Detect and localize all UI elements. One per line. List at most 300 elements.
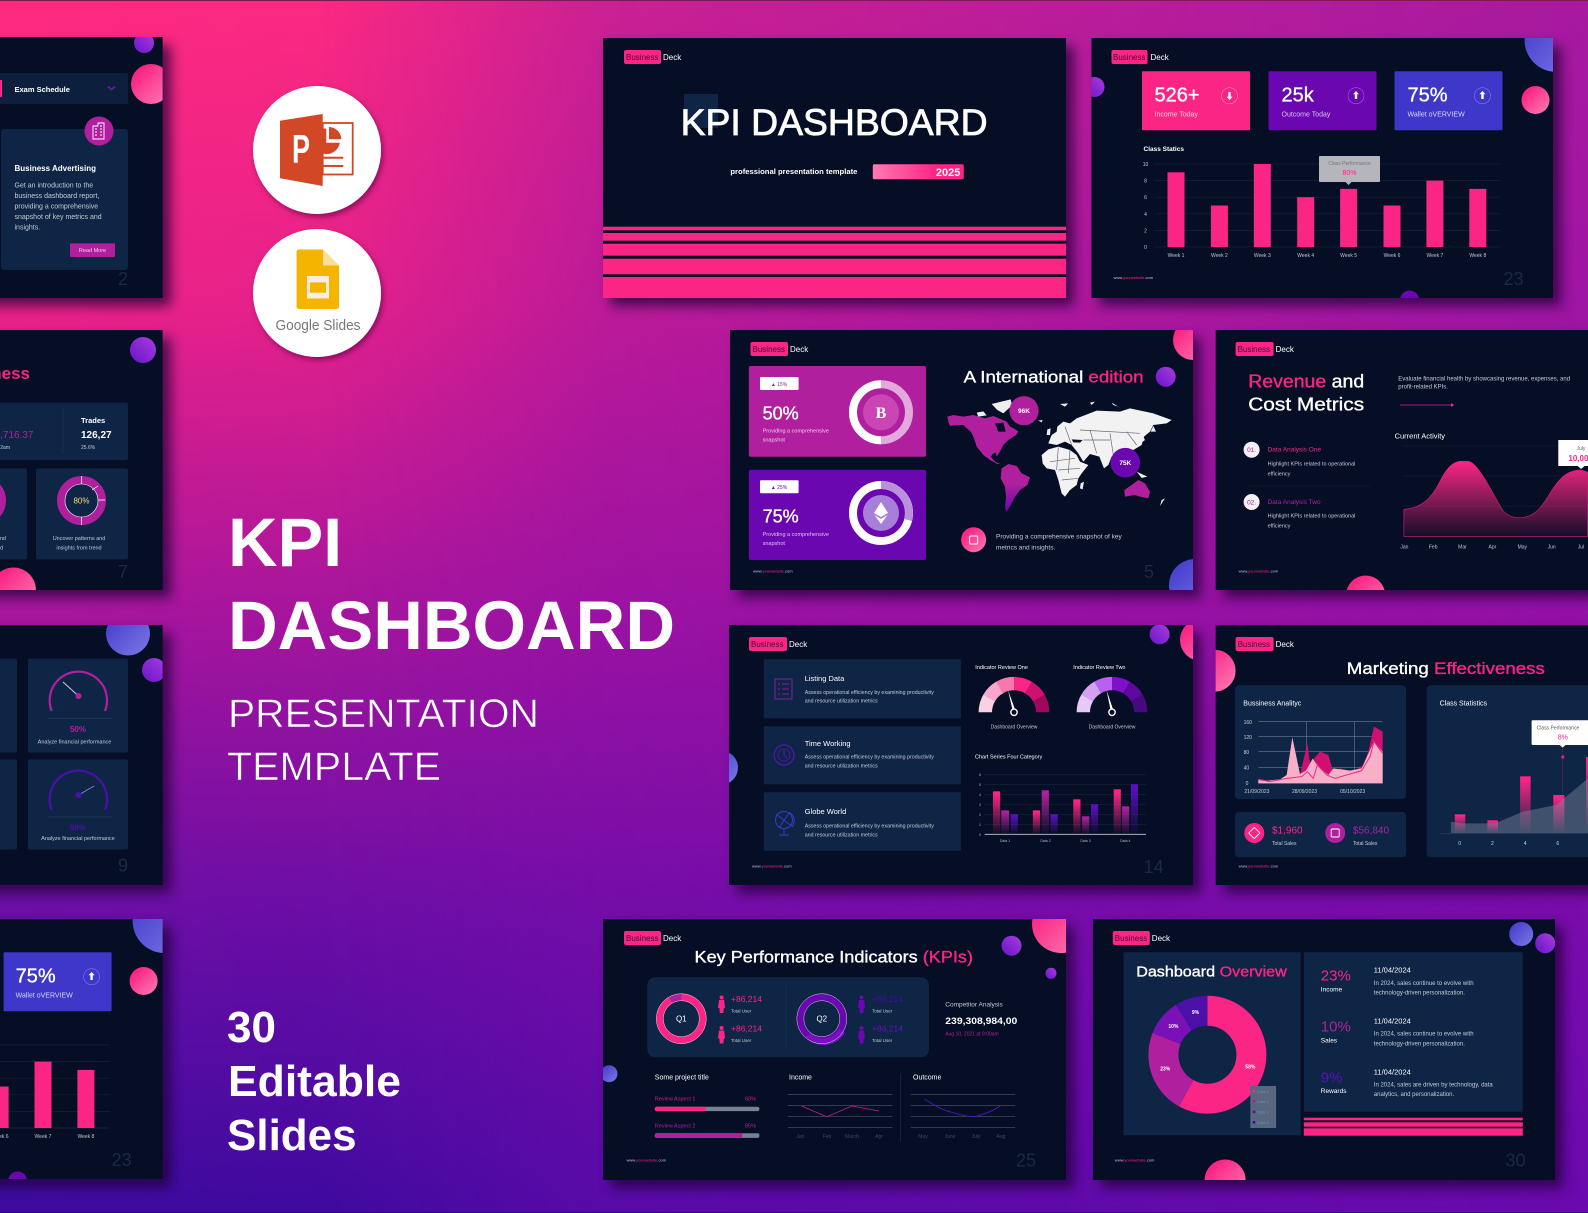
exam schedule bar: Exam Schedule xyxy=(14,85,70,94)
logo: Business xyxy=(752,345,785,354)
list item 02: efficiency xyxy=(1268,524,1291,530)
progress bars: Review Aspect 1 xyxy=(655,1097,695,1103)
icon: PowerPoint badge xyxy=(253,86,381,214)
gauge card top: 50% xyxy=(70,725,86,734)
panel: quarter stats xyxy=(647,977,929,1057)
user stats: +86,214 xyxy=(731,994,762,1004)
card: listing data: and resource utilization metrics xyxy=(805,699,878,705)
panel: class statistics: 4 xyxy=(1524,841,1527,847)
panel: business analytic: 28/09/2023 xyxy=(1292,789,1317,795)
list item 02: 02. xyxy=(1247,499,1256,506)
card: ethereum 75%: snapshot xyxy=(763,541,785,547)
logo xyxy=(1236,637,1295,651)
donut card left: nd xyxy=(0,536,6,542)
panel: class statistics: 6 xyxy=(1556,841,1559,847)
gauge card top xyxy=(28,659,128,753)
gauge one xyxy=(975,665,1043,741)
panel: marketing effectiveness slide xyxy=(1194,625,1588,893)
donut card right: Uncover patterns and xyxy=(53,536,105,542)
card: bitcoin 50% xyxy=(749,366,926,457)
icon and caption: metrics and insights. xyxy=(996,544,1055,551)
card: business advertising: snapshot of key metrics and xyxy=(14,214,102,221)
panel: class statistics: Class Statistics xyxy=(1440,700,1488,707)
map: South America xyxy=(1001,464,1030,512)
legend: Data 2 xyxy=(1257,1099,1269,1104)
stats panel: Trades xyxy=(81,416,105,425)
footer url: www.yourwebsite.com xyxy=(753,568,793,574)
user stats: Total User xyxy=(731,1038,752,1043)
tagline: professional presentation template xyxy=(730,167,857,176)
logo xyxy=(624,50,682,64)
heading xyxy=(1248,372,1364,415)
card: bitcoin 50%: Providing a comprehensive xyxy=(763,429,829,435)
wallet card xyxy=(4,952,112,1011)
user stats: +86,214 xyxy=(731,1023,762,1033)
user stats: +86,214 xyxy=(872,1023,903,1033)
logo xyxy=(1236,342,1295,356)
footer url: www.yourwebsite.com xyxy=(1114,275,1154,280)
card: globe world: and resource utilization metrics xyxy=(805,832,878,838)
logo xyxy=(624,931,682,945)
logo: Deck xyxy=(663,53,682,62)
icon: Google Slides badge xyxy=(253,229,381,357)
page number: 5 xyxy=(1144,562,1154,582)
area chart: Feb xyxy=(1429,545,1438,551)
subtitle: TEMPLATE xyxy=(227,745,441,789)
bar chart: 0 xyxy=(1144,245,1147,251)
bar chart: Week 7 xyxy=(1426,253,1444,259)
panel: title slide KPI Dashboard xyxy=(603,38,1074,306)
chart heading: Current Activity xyxy=(1395,431,1445,440)
panel: sales stats xyxy=(1235,812,1406,857)
outcome line chart: July xyxy=(972,1134,981,1140)
gauge one: Dashboard Overview xyxy=(991,725,1038,731)
card: listing data: Assess operational efficiency by examining productivity xyxy=(805,690,934,696)
bubble 75K xyxy=(1110,448,1140,478)
slide count text xyxy=(227,1003,401,1160)
stat card: income xyxy=(1142,71,1250,130)
grouped bar chart: Data 4 xyxy=(1120,839,1131,843)
grouped bar chart: 0 xyxy=(979,833,981,837)
card: bitcoin 50%: B xyxy=(876,405,887,422)
card: time working: Assess operational efficiency by examining productivity xyxy=(805,755,934,761)
description: Evaluate financial health by showcasing revenue, expenses, and xyxy=(1398,377,1570,383)
logo: Business xyxy=(751,640,783,649)
stats panel xyxy=(0,403,128,460)
subtitle: PRESENTATION xyxy=(228,692,539,736)
donut card right: 80% xyxy=(73,496,90,506)
tooltip: Class Performance xyxy=(1328,161,1371,167)
donut card right xyxy=(36,468,128,559)
year pill: 2025 xyxy=(936,167,960,179)
stat card: wallet: 75% xyxy=(1408,85,1448,107)
panel: KPI details: technology-driven personalization. xyxy=(1374,1041,1465,1047)
card: business advertising: Business Advertising xyxy=(14,164,96,173)
card: time working xyxy=(764,726,961,784)
bar chart fragment: Week 8 xyxy=(77,1134,95,1140)
donut card left: d xyxy=(0,546,3,552)
progress bars: 85% xyxy=(745,1123,756,1129)
user stats: Total User xyxy=(872,1008,893,1013)
panel: KPI details: analytics, and personalization. xyxy=(1374,1092,1455,1098)
heading: Key Performance Indicators (KPIs) xyxy=(694,948,973,967)
main title: KPI xyxy=(228,504,342,581)
bar chart: 6 xyxy=(1144,195,1147,201)
grouped bar chart xyxy=(979,773,1146,843)
map: North America and Australia xyxy=(947,415,1150,498)
panel: KPI details: 10% xyxy=(1321,1019,1351,1036)
gauge one: Indicator Review One xyxy=(975,665,1028,671)
area chart: Jul xyxy=(1578,545,1584,551)
heading: Cost Metrics xyxy=(1248,395,1364,415)
legend xyxy=(1250,1086,1276,1128)
map: Eurasia and Africa xyxy=(1042,408,1172,497)
gauge two: Indicator Review Two xyxy=(1073,665,1125,671)
gauge card top: Analyze financial performance xyxy=(38,740,111,746)
panel: donut chart: 23% xyxy=(1160,1066,1171,1072)
footer url: www.yourwebsite.com xyxy=(752,864,792,868)
logo: Deck xyxy=(1276,640,1295,649)
bar chart xyxy=(1143,162,1500,259)
panel: sales stats: Total Sales xyxy=(1272,841,1297,847)
panel: KPI details: technology-driven personalization. xyxy=(1374,991,1465,997)
list item 02: Data Analysis Two xyxy=(1268,499,1321,506)
heading: Marketing Effectiveness xyxy=(1347,659,1545,678)
panel: international edition slide (5) xyxy=(730,320,1221,611)
outcome line chart xyxy=(911,1075,1015,1140)
stats panel: 25.6% xyxy=(81,445,96,451)
panel: left slide Gauges (9) xyxy=(0,612,171,893)
map: Arctic and islands xyxy=(977,399,1165,506)
logo: Deck xyxy=(1276,345,1295,354)
page number: 25 xyxy=(1016,1151,1036,1171)
panel: KPI details: Rewards xyxy=(1321,1088,1347,1095)
bar chart: 8 xyxy=(1144,179,1147,185)
grouped bar chart: 6 xyxy=(979,773,981,777)
tooltip: Class Performance xyxy=(1537,726,1579,732)
footer url: www.yourwebsite.com xyxy=(626,1158,667,1162)
description: profit-related KPIs. xyxy=(1398,385,1448,391)
card: globe world xyxy=(764,792,961,851)
card: business advertising: Get an introduction to the xyxy=(14,182,93,190)
page number: 9 xyxy=(118,856,128,876)
list item 01: efficiency xyxy=(1268,472,1291,478)
panel: KPI details: In 2024, sales are driven by technology, data xyxy=(1374,1082,1493,1088)
income line chart: Jan xyxy=(796,1134,805,1140)
tooltip: 8% xyxy=(1558,734,1568,741)
bubble 96K xyxy=(1009,396,1039,425)
tooltip: July xyxy=(1577,446,1586,452)
bar chart: Week 8 xyxy=(1469,253,1486,259)
heading: A International edition xyxy=(964,367,1144,386)
panel: weekly bar chart slide (23) xyxy=(1084,8,1588,310)
wallet card: 75% xyxy=(16,966,56,988)
card: listing data xyxy=(764,659,961,718)
card: business advertising: Read More xyxy=(79,248,106,254)
gauge card bottom xyxy=(28,760,128,850)
logo: Deck xyxy=(1152,934,1171,943)
card: ethereum 75% xyxy=(749,470,926,560)
outcome line chart: June xyxy=(945,1134,956,1140)
panel: business analytic: 05/10/2023 xyxy=(1340,789,1365,795)
page number: 30 xyxy=(1506,1151,1526,1171)
user stats: Total User xyxy=(872,1038,893,1043)
grouped bar chart: Data 3 xyxy=(1080,839,1091,843)
outcome line chart: May xyxy=(918,1134,928,1140)
logo: Deck xyxy=(1150,53,1170,62)
bar chart: Week 3 xyxy=(1254,253,1271,259)
bar chart: Week 1 xyxy=(1168,253,1185,259)
icon and caption: Providing a comprehensive snapshot of key xyxy=(996,534,1122,541)
card: business advertising: providing a comprehensive xyxy=(14,204,98,210)
panel: KPI details: 11/04/2024 xyxy=(1374,1016,1411,1025)
slide title: KPI DASHBOARD xyxy=(681,102,988,143)
bar chart: 4 xyxy=(1144,212,1147,218)
panel: donut chart xyxy=(1124,952,1301,1135)
main title xyxy=(228,504,675,664)
panel: sales stats: $1,960 xyxy=(1272,825,1303,836)
area chart: Apr xyxy=(1489,545,1497,551)
panel: class statistics: 0 xyxy=(1458,841,1461,847)
card: globe world: Assess operational efficiency by examining productivity xyxy=(805,823,934,829)
progress bars: Some project title xyxy=(655,1075,709,1082)
pink stripes xyxy=(1304,1118,1523,1136)
subtitle xyxy=(227,692,539,789)
panel: KPI details: 23% xyxy=(1321,968,1351,985)
logo xyxy=(749,637,808,651)
donut Q2: Q2 xyxy=(816,1014,828,1024)
panel: business analytic: 160 xyxy=(1244,720,1252,726)
bar chart: Week 6 xyxy=(1384,253,1401,259)
panel: donut chart: Dashboard Overview xyxy=(1136,963,1287,980)
legend: Data 3 xyxy=(1257,1110,1269,1115)
list item 01 xyxy=(1244,442,1355,478)
panel: donut chart: 9% xyxy=(1192,1010,1200,1016)
progress bars: 60% xyxy=(745,1097,756,1103)
icon and caption xyxy=(961,527,1122,552)
income line chart: Apr xyxy=(875,1134,883,1140)
logo: Business xyxy=(626,53,658,62)
tooltip xyxy=(1319,156,1380,185)
logo xyxy=(1113,931,1171,945)
legend: Data 4 xyxy=(1257,1120,1269,1125)
page number: 7 xyxy=(118,562,128,582)
card: business advertising: insights. xyxy=(14,225,40,232)
slide count text: 30 xyxy=(227,1003,276,1052)
grouped bar chart: 1 xyxy=(979,823,981,827)
gauge card bottom: 50% xyxy=(70,824,86,833)
panel: class statistics xyxy=(1427,685,1588,857)
panel: KPI details: 11/04/2024 xyxy=(1374,966,1411,975)
card: bitcoin 50%: ▲ 15% xyxy=(771,382,788,388)
grouped bar chart: Data 2 xyxy=(1040,839,1051,843)
logo: Business xyxy=(1115,934,1147,943)
bar chart: Week 5 xyxy=(1340,253,1357,259)
stat card: income: 526+ xyxy=(1154,85,1200,107)
outcome line chart: Aug xyxy=(997,1134,1006,1140)
panel: revenue and cost metrics slide xyxy=(1216,330,1588,614)
outcome line chart: Outcome xyxy=(913,1075,942,1082)
panel: dashboard overview slide (30) xyxy=(1093,919,1563,1200)
donut card right: insights from trend xyxy=(56,546,102,552)
area chart xyxy=(1400,446,1588,551)
panel: sales stats: Total Sales xyxy=(1353,841,1378,847)
stat card: wallet: Wallet oVERVIEW xyxy=(1408,112,1465,119)
panel: sales stats: $56,840 xyxy=(1353,825,1389,836)
arrow xyxy=(1400,403,1454,407)
gauge two xyxy=(1073,665,1141,741)
bar chart fragment xyxy=(0,1045,110,1140)
icon: PowerPoint badge: P xyxy=(292,128,310,172)
stat card: outcome: Outcome Today xyxy=(1282,112,1331,119)
income line chart: Income xyxy=(789,1075,812,1082)
competitor analysis: 239,308,984,00 xyxy=(945,1016,1017,1026)
footer url: www.yourwebsite.com xyxy=(1115,1158,1155,1162)
logo xyxy=(1112,50,1170,64)
chart heading: Chart Series Four Category xyxy=(975,754,1042,760)
card: time working: Time Working xyxy=(805,739,851,748)
panel: KPI details: 11/04/2024 xyxy=(1374,1067,1411,1076)
user stats xyxy=(718,994,903,1044)
main title: DASHBOARD xyxy=(228,587,675,664)
progress bars: Review Aspect 2 xyxy=(655,1123,695,1129)
panel: class statistics: 2 xyxy=(1491,841,1494,847)
panel: left slide Business (7) xyxy=(0,330,171,612)
logo: Deck xyxy=(790,345,809,354)
panel: business analytic: 40 xyxy=(1244,766,1249,772)
card: ethereum 75%: 75% xyxy=(763,507,799,527)
panel: KPI details: Income xyxy=(1321,986,1343,993)
logo: Deck xyxy=(789,640,808,649)
panel: KPI details: In 2024, sales continue to evolve with xyxy=(1374,981,1474,987)
description xyxy=(1398,377,1570,391)
logo: Business xyxy=(1238,345,1270,354)
area chart: Jan xyxy=(1400,545,1409,551)
page number: 2 xyxy=(118,269,128,289)
user stats: Total User xyxy=(731,1008,752,1013)
area chart: May xyxy=(1518,545,1528,551)
world map xyxy=(947,399,1172,512)
chart heading: Class Statics xyxy=(1144,146,1184,153)
bubble 96K: 96K xyxy=(1018,408,1030,415)
page number: 23 xyxy=(1504,269,1524,289)
donut Q1: Q1 xyxy=(676,1014,687,1024)
tooltip xyxy=(1558,440,1588,469)
income line chart: March xyxy=(845,1134,859,1140)
panel: business analytic: 120 xyxy=(1244,735,1252,741)
footer url: www.yourwebsite.com xyxy=(1239,864,1279,868)
panel: business analytic: 80 xyxy=(1244,750,1249,756)
bar chart fragment: Week 7 xyxy=(35,1134,52,1140)
income line chart: Feb xyxy=(823,1134,832,1140)
card: listing data: Listing Data xyxy=(805,674,845,683)
donut card left xyxy=(0,468,27,559)
panel: left slide Wallet (23) xyxy=(0,889,197,1190)
logo: Deck xyxy=(663,934,682,943)
donut Q1 xyxy=(656,994,706,1044)
list item 02 xyxy=(1244,494,1355,530)
tooltip xyxy=(1532,720,1588,748)
panel: KPI details: In 2024, sales continue to evolve with xyxy=(1374,1032,1474,1038)
panel: KPI details: Sales xyxy=(1321,1037,1338,1044)
map: country borders xyxy=(1050,427,1140,480)
panel: donut chart: 58% xyxy=(1245,1064,1256,1070)
bubble 75K: 75K xyxy=(1119,460,1132,467)
footer url: www.yourwebsite.com xyxy=(1239,568,1279,574)
year pill xyxy=(873,164,964,179)
card: ethereum 75%: ▲ 25% xyxy=(771,485,788,491)
stat card: wallet xyxy=(1394,71,1502,130)
wallet card: Wallet oVERVIEW xyxy=(16,993,73,1000)
panel: listing data and gauges slide (14) xyxy=(704,619,1222,893)
card: globe world: Globe World xyxy=(805,807,846,816)
logo: Business xyxy=(1238,640,1270,649)
stats panel: 126,27 xyxy=(81,430,112,441)
bar chart: 10 xyxy=(1143,162,1148,168)
card: time working: and resource utilization metrics xyxy=(805,764,878,770)
panel: left slide Exam Schedule (2) xyxy=(0,33,171,306)
grouped bar chart: 2 xyxy=(979,813,981,817)
competitor analysis: Aug 10, 2021 at 9:00am xyxy=(945,1031,999,1037)
area chart: Mar xyxy=(1458,545,1467,551)
card: business advertising: business dashboard report, xyxy=(14,193,99,200)
stat card: outcome xyxy=(1268,71,1376,130)
panel: KPI details: 9% xyxy=(1321,1069,1342,1086)
tooltip: 80% xyxy=(1342,170,1357,177)
competitor analysis xyxy=(945,1002,1017,1037)
logo xyxy=(750,342,809,356)
panel: KPI details xyxy=(1304,952,1523,1112)
grouped bar chart: 4 xyxy=(979,793,981,797)
card: bitcoin 50%: snapshot xyxy=(763,438,785,444)
list item 02: Highlight KPIs related to operational xyxy=(1268,513,1355,519)
icon: Google Slides badge: Google Slides xyxy=(276,317,360,334)
panel: donut chart: 10% xyxy=(1168,1024,1179,1030)
grouped bar chart: 5 xyxy=(979,783,981,787)
pink stripes xyxy=(603,227,1066,298)
logo: Business xyxy=(1113,53,1145,62)
list item 01: Data Analysis One xyxy=(1268,447,1321,454)
logo: Business xyxy=(626,934,658,943)
panel: business analytic: 21/09/2023 xyxy=(1244,789,1270,795)
stats panel: 2am xyxy=(0,445,10,451)
grouped bar chart: Data 1 xyxy=(1000,839,1010,843)
card: business advertising xyxy=(1,116,128,270)
grouped bar chart: 3 xyxy=(979,803,981,807)
competitor analysis: Competitor Analysis xyxy=(945,1002,1003,1009)
panel: business analytic: Bussiness Analityc xyxy=(1243,700,1302,707)
panel: key performance indicators slide (25) xyxy=(600,895,1090,1188)
card: bitcoin 50%: 50% xyxy=(763,403,799,423)
legend: Data 1 xyxy=(1257,1089,1269,1094)
progress bars xyxy=(655,1075,759,1138)
area chart: Jun xyxy=(1548,545,1556,551)
gauge two: Dashboard Overview xyxy=(1089,725,1136,731)
exam schedule bar xyxy=(0,73,128,104)
donut Q2 xyxy=(797,994,847,1044)
card: ethereum 75%: Providing a comprehensive xyxy=(763,532,829,538)
bar chart: Week 4 xyxy=(1297,253,1314,259)
panel: business analytic xyxy=(1235,685,1406,799)
stat card: income: Income Today xyxy=(1154,112,1198,119)
gauge card bottom: Analyze financial performance xyxy=(41,836,115,842)
page number: 14 xyxy=(1144,857,1164,877)
bar chart: Week 2 xyxy=(1211,253,1228,259)
panel: business analytic: 0 xyxy=(1246,781,1249,787)
slide count text: Slides xyxy=(227,1111,357,1160)
stat card: outcome: 25k xyxy=(1282,85,1315,107)
slide count text: Editable xyxy=(228,1057,401,1106)
